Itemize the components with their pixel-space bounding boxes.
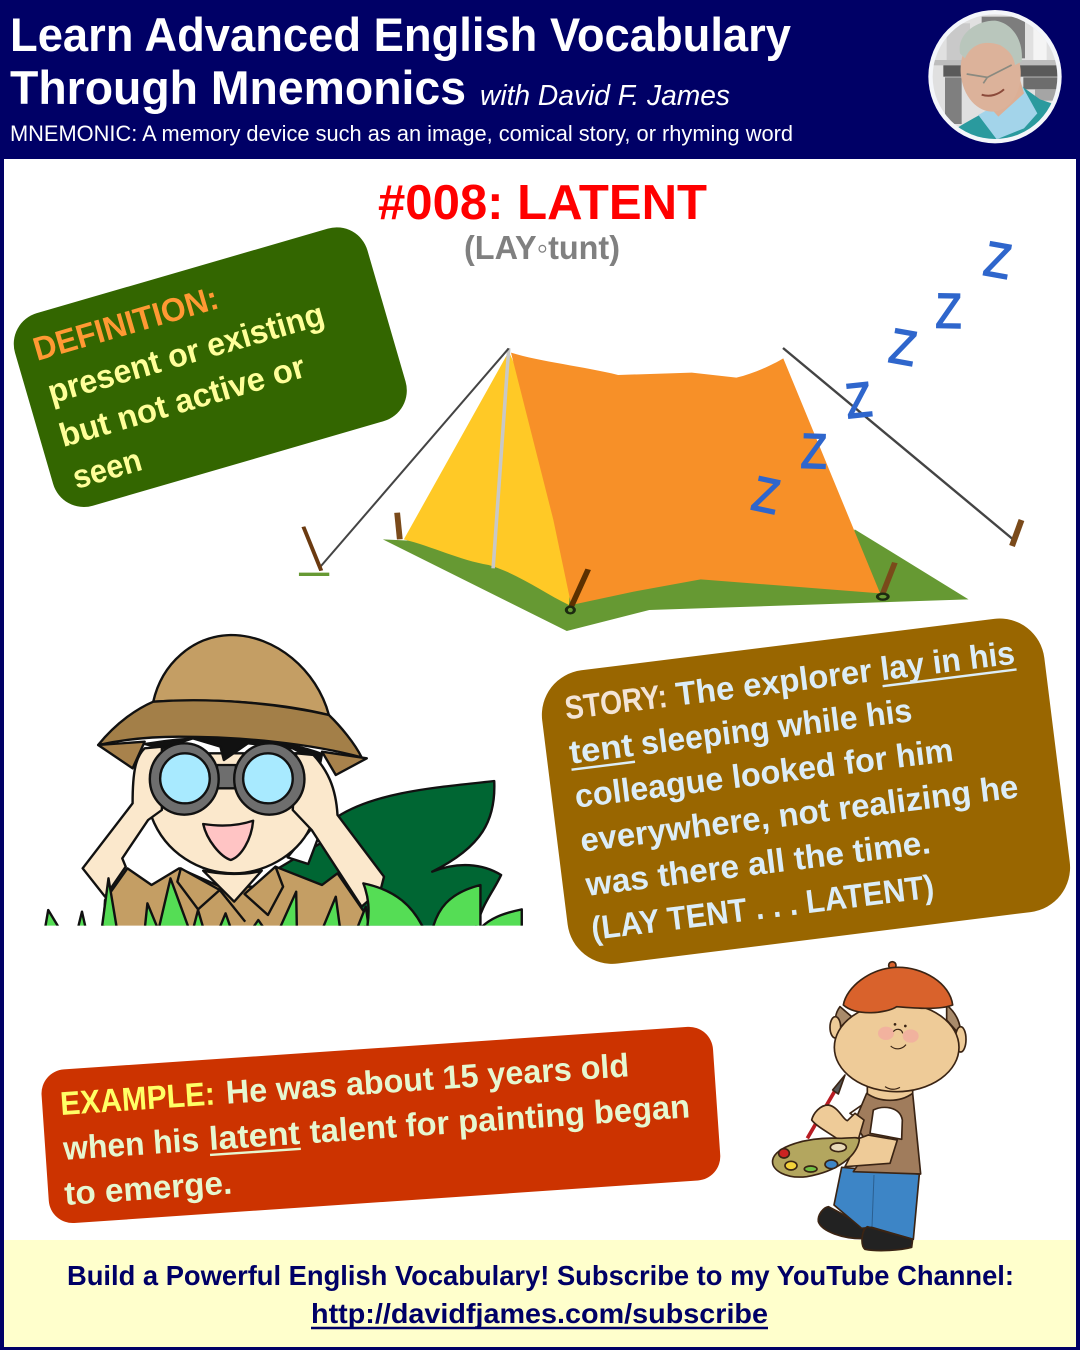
icon: sleeping Zs: Z [935,284,962,339]
story text: everywhere, not realizing he [578,768,1020,859]
palette [773,1138,859,1177]
left shoe [818,1207,864,1239]
story text: tent [567,726,635,771]
facial features [885,1029,906,1089]
icon: sleeping Zs: Z [885,319,920,377]
cheeks [878,1027,919,1043]
grass and foreground leaves [45,878,522,930]
right shoe [862,1227,913,1251]
story text: was there all the time. [583,823,932,903]
white collar behind arm [850,1104,865,1123]
example text [57,1042,694,1212]
example label: EXAMPLE: [59,1075,216,1122]
story text: sleeping while his [639,691,914,762]
trousers [834,1167,919,1239]
title line 1: Learn Advanced English Vocabulary [10,8,791,61]
hat underside [98,742,367,775]
tent front flap [404,352,576,605]
story label: STORY: [563,677,669,726]
story text: colleague looked for him [573,731,955,815]
example text: to emerge. [63,1164,233,1212]
head [834,1003,959,1092]
front stake [566,569,588,613]
hat brim [98,700,362,757]
tent side canvas [511,353,880,605]
illustration: tent with ground sheet [299,348,969,631]
hat dome [153,635,329,715]
icon: sleeping Zs: Z [843,373,875,429]
neck [867,1082,913,1103]
left stake [299,527,329,574]
left arm and hand [83,747,162,897]
paint brush [807,1075,845,1138]
definition text: but not active or [55,347,309,454]
header banner [0,0,1080,159]
definition text: present or existing [43,295,328,410]
face [148,753,312,873]
example text: when his [61,1121,200,1167]
underlines [566,669,1022,770]
right arm and hand [293,753,384,907]
underline [210,1149,301,1155]
icon: sleeping Zs: Z [747,467,784,525]
white sleeve [870,1107,902,1139]
icon: sleeping Zs: Z [800,425,828,479]
story text: lay in his [878,634,1017,687]
hair behind head [835,1005,960,1035]
definition text [42,295,353,496]
subscribe link: http://davidfjames.com/subscribe [311,1298,768,1329]
example text: talent for painting began [308,1087,691,1150]
right stake [877,563,895,600]
author credit: with David F. James [480,80,730,112]
example text: latent [208,1114,301,1157]
title line 2: Through Mnemonics [10,61,466,114]
ground sheet [383,529,969,631]
hair [145,738,322,763]
panel: story [537,613,1075,969]
mouth [203,821,253,860]
definition text: seen [68,441,146,496]
ears [830,1017,966,1052]
shirt [103,867,365,930]
panel: example [40,1025,722,1225]
neck and collar [177,867,283,922]
footer band [4,1240,1076,1347]
beret [843,962,953,1013]
arm with brush hand [812,1105,864,1141]
author portrait [928,10,1063,150]
illustration: boy painter with palette [773,962,966,1251]
binoculars [150,743,304,815]
story text: The explorer [674,652,874,713]
mnemonic definition line: MNEMONIC: A memory device such as an image, comical story, or rhyming word [10,121,793,146]
definition label: DEFINITION: [29,279,223,368]
heading: word number and term: #008: LATENT [378,176,707,230]
example text: He was about 15 years old [225,1046,630,1111]
illustration: explorer with binoculars [45,635,522,930]
icon: sleeping Zs: Z [980,232,1015,290]
panel: definition [6,220,414,515]
subscribe call to action: Build a Powerful English Vocabulary! Subscribe to my YouTube Channel: [67,1260,1014,1291]
icon: sleeping Zs [747,232,1015,525]
left guy rope [319,348,509,568]
story text [561,634,1044,947]
dark green leaf [276,781,501,930]
pronunciation: (LAY◦tunt) [464,229,620,266]
vest [853,1093,921,1174]
right guy rope and stake [783,348,1022,546]
palette arm [845,1135,897,1167]
tent pole [493,348,509,568]
rear stake [397,513,400,539]
eyes [894,1023,907,1027]
story text: (LAY TENT . . . LATENT) [589,868,936,947]
white collar [288,828,319,864]
